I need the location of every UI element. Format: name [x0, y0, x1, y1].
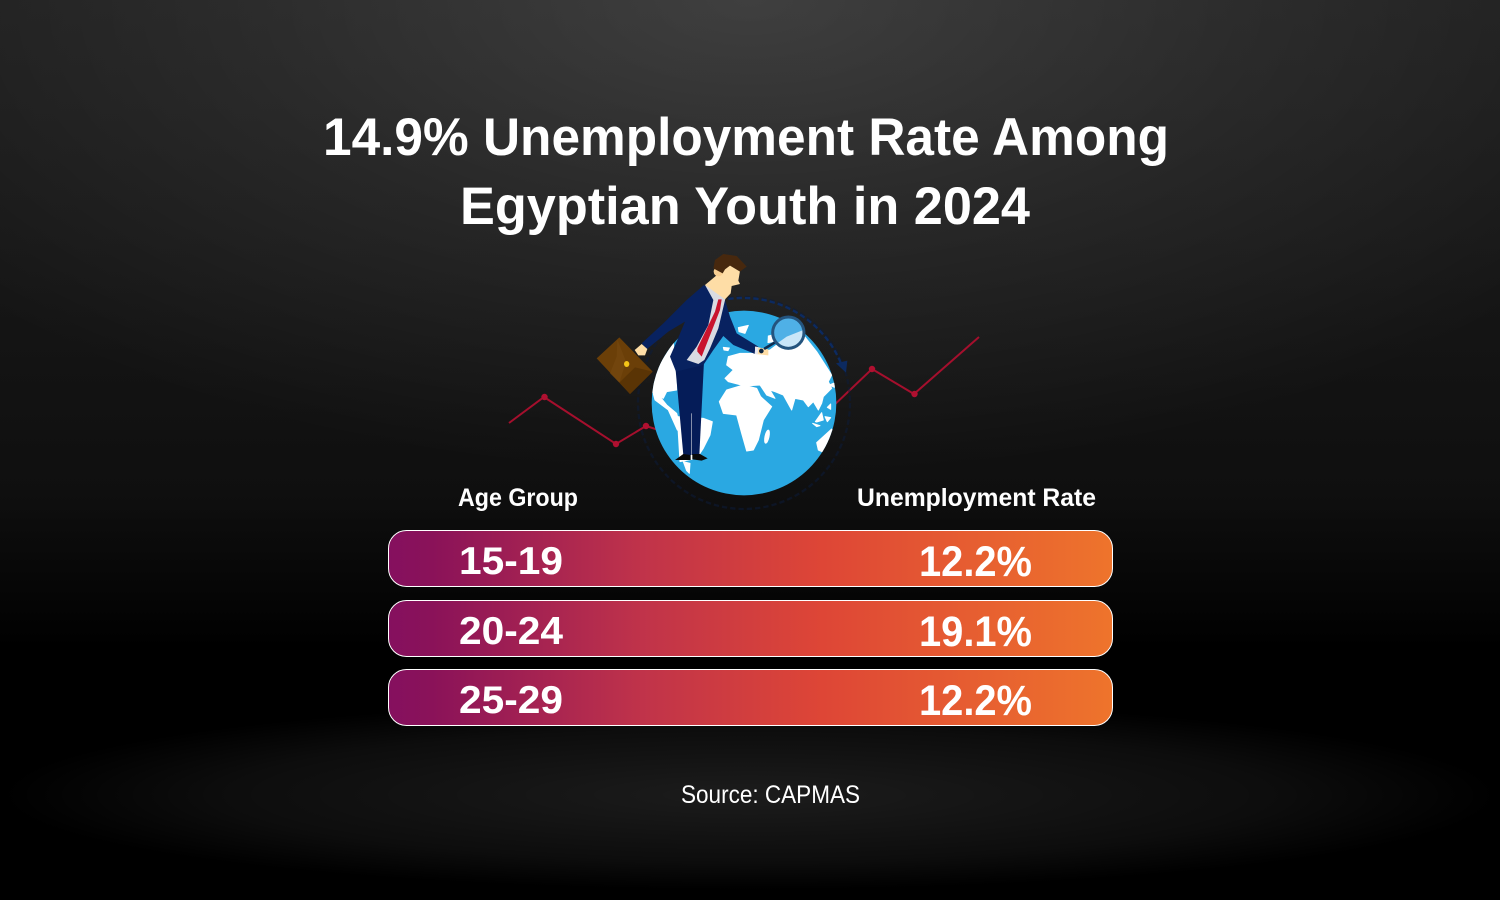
jacket and arms — [642, 285, 758, 372]
row: 25-29 — [388, 670, 1112, 726]
title — [323, 108, 1169, 236]
column header: unemployment rate: Unemployment Rate — [857, 484, 1096, 512]
row: 20-24 — [388, 600, 1112, 656]
hands and cuffs — [635, 344, 647, 355]
column header: age group: Age Group — [458, 484, 578, 512]
icon: globe — [650, 311, 837, 495]
icon: businessman — [635, 254, 768, 461]
line chart: trend behind globe — [509, 337, 979, 447]
title: Egyptian Youth in 2024 — [460, 177, 1031, 236]
row: 25-29: 12.2% — [919, 677, 1032, 725]
shirt — [687, 285, 726, 364]
row: 20-24: 19.1% — [919, 608, 1032, 656]
tie — [697, 299, 722, 357]
icon: dashed orbit arrow — [638, 297, 850, 509]
icon: briefcase — [597, 337, 653, 394]
hair — [713, 254, 747, 273]
row: 20-24: 20-24 — [459, 610, 563, 653]
row: 15-19 — [388, 530, 1112, 586]
neck and head — [705, 265, 740, 299]
source note: Source: CAPMAS — [681, 781, 860, 809]
title: 14.9% Unemployment Rate Among — [323, 108, 1169, 167]
illustration: businessman inspecting globe — [597, 254, 850, 509]
legs — [675, 362, 704, 455]
shoes — [675, 454, 708, 461]
row: 15-19: 15-19 — [459, 540, 563, 583]
icon: magnifying glass — [765, 317, 804, 350]
row: 15-19: 12.2% — [919, 538, 1032, 586]
row: 25-29: 25-29 — [459, 679, 563, 722]
